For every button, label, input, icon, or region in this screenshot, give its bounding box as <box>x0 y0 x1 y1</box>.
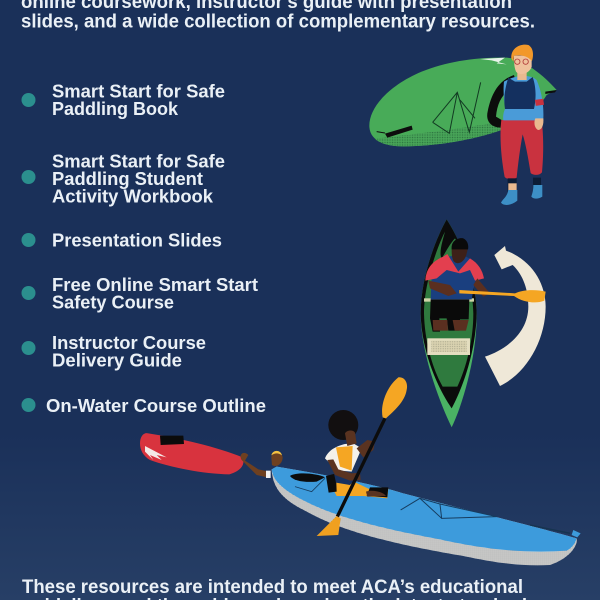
intro text block: slides, and a wide collection of complementary resources. <box>21 12 535 32</box>
illustration: person carrying green kayak <box>369 45 557 205</box>
list item: workbook <box>22 152 225 206</box>
illustration: kayaker towing red kayak <box>140 377 581 565</box>
canoe hull <box>421 219 477 427</box>
list item: delivery guide: Delivery Guide <box>52 350 182 370</box>
cream turn arrow <box>485 246 546 386</box>
illustration: paddler in canoe <box>421 219 546 427</box>
list item: online course <box>22 275 258 312</box>
closing text block: These resources are intended to meet ACA’s educational <box>22 577 523 598</box>
green kayak <box>369 58 557 146</box>
yellow paddle <box>459 290 546 302</box>
list item: delivery guide <box>22 333 206 370</box>
kayak paddle <box>317 377 407 536</box>
list item: online course: Free Online Smart Start <box>52 275 258 295</box>
list item: workbook: Activity Workbook <box>52 186 214 206</box>
list item: book: Smart Start for Safe <box>52 82 225 102</box>
paddler <box>425 238 490 332</box>
towed swimmer <box>241 451 283 478</box>
list item: online course: Safety Course <box>52 292 174 312</box>
kayaker <box>325 410 388 498</box>
resource list <box>22 82 266 416</box>
list item: workbook: Paddling Student <box>52 169 203 189</box>
head and hair <box>511 45 533 80</box>
list item: slides: Presentation Slides <box>52 230 222 250</box>
list item: on-water outline: On-Water Course Outline <box>46 396 266 416</box>
list item: delivery guide: Instructor Course <box>52 333 206 353</box>
intro text block <box>21 0 535 32</box>
list item: book <box>22 82 225 119</box>
blue kayak <box>272 467 581 565</box>
torso and vest <box>503 76 543 120</box>
red kayak <box>140 433 243 474</box>
black arm and strap <box>487 75 517 128</box>
list item: book: Paddling Book <box>52 99 179 119</box>
legs <box>501 120 543 179</box>
boots <box>501 178 542 205</box>
hand <box>534 118 543 130</box>
list item: workbook: Smart Start for Safe <box>52 152 225 172</box>
